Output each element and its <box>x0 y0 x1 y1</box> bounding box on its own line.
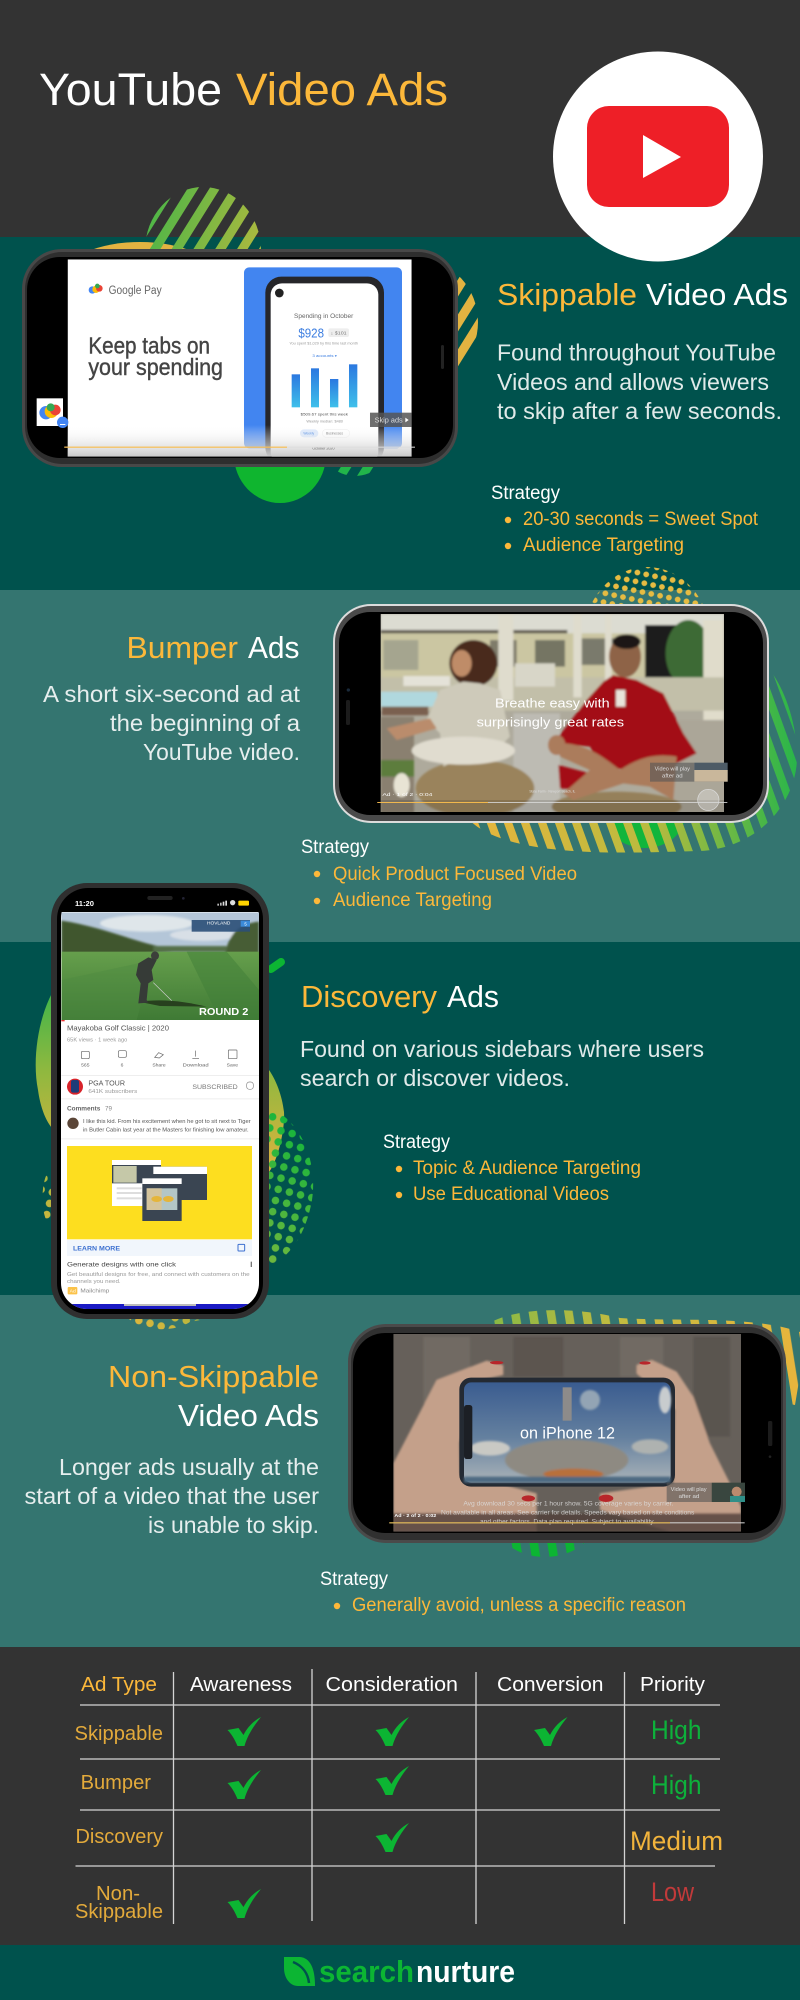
description: Found on various sidebars where users <box>300 1036 704 1062</box>
title <box>39 64 448 115</box>
description: Longer ads usually at the <box>59 1454 319 1480</box>
phone mockup: golf video with discovery ad: Get beautiful designs for free, and connect with customers on the <box>67 1272 250 1278</box>
heading: Skippable <box>497 277 637 312</box>
panel background: header <box>0 0 800 237</box>
strategy list <box>491 483 759 556</box>
table header row: Awareness <box>190 1673 292 1696</box>
phone mockup: google pay ad: ↓ $101 <box>331 330 347 335</box>
description: search or discover videos. <box>300 1065 570 1091</box>
phone mockup: golf video with discovery ad: 565 <box>81 1063 90 1069</box>
strategy list <box>383 1132 641 1205</box>
description: the beginning of a <box>110 710 301 736</box>
table row labels <box>74 1723 163 1923</box>
title: YouTube <box>39 64 222 115</box>
phone mockup: google pay ad: $509.67 spent this week <box>301 412 348 417</box>
phone mockup: iphone 12 ad: and other factors. Data plan required. Subject to availability. <box>480 1518 655 1525</box>
table header row: Ad Type <box>81 1673 157 1696</box>
heading: Video Ads <box>646 277 788 312</box>
phone mockup: meditation ad: after ad <box>662 773 683 779</box>
phone mockup: golf video with discovery ad: Comments <box>67 1106 101 1112</box>
phone mockup: google pay ad: October 2020 <box>312 446 334 450</box>
table header row: Consideration <box>326 1673 458 1696</box>
strategy list: 20-30 seconds = Sweet Spot <box>523 509 759 530</box>
phone mockup: golf video with discovery ad: Save <box>227 1063 238 1069</box>
phone mockup: golf video with discovery ad: 641K subscribers <box>88 1089 138 1095</box>
description: Videos and allows viewers <box>497 369 769 395</box>
phone mockup: google pay ad: $928 <box>298 326 324 340</box>
phone mockup: meditation ad: Video will play <box>655 767 690 773</box>
phone mockup: golf video with discovery ad: Mailchimp <box>80 1289 109 1295</box>
panel background: footer <box>0 1945 800 2000</box>
phone mockup: golf video with discovery ad: Download <box>183 1063 209 1069</box>
table row labels: Skippable <box>75 1901 163 1923</box>
panel: discovery ads <box>36 883 704 1329</box>
phone mockup: google pay ad: Google Pay <box>109 283 162 297</box>
panel background: comparison table <box>0 1647 800 1945</box>
panel background: bumper <box>0 590 800 942</box>
table header row: Conversion <box>497 1673 604 1696</box>
heading <box>108 1359 319 1433</box>
phone mockup: iphone 12 ad: Not available in all areas. See carrier for details. Speeds vary based on site conditions <box>441 1510 694 1517</box>
phone mockup: iphone 12 ad: after ad <box>679 1494 699 1500</box>
phone mockup: golf video with discovery ad: 79 <box>105 1106 113 1112</box>
phone mockup: iphone 12 ad: Ad · 2 of 2 · 0:02 <box>394 1513 437 1519</box>
table header row <box>81 1673 706 1696</box>
heading: Ads <box>248 630 300 665</box>
phone mockup: golf video with discovery ad: 5 <box>244 921 247 926</box>
phone mockup: golf video with discovery ad: I like this kid. From his excitement when he got to sit next to Tiger <box>83 1119 251 1125</box>
phone mockup: iphone 12 ad <box>348 1324 786 1543</box>
decorative blobs <box>64 187 478 503</box>
phone mockup: meditation ad: State Farm · Newport Beach, IL <box>529 790 575 794</box>
phone mockup: google pay ad: Weekly <box>303 432 315 436</box>
strategy list <box>320 1569 686 1616</box>
panel background: discovery <box>0 942 800 1295</box>
phone mockup: golf video with discovery ad: 11:20 <box>75 901 94 908</box>
panel: bumper ads <box>43 567 797 911</box>
heading: Video Ads <box>178 1398 319 1433</box>
priority values: Low <box>651 1877 695 1907</box>
phone mockup: google pay ad: your spending <box>88 354 223 380</box>
panel background: skippable <box>0 237 800 590</box>
description <box>24 1454 319 1538</box>
strategy list: Use Educational Videos <box>413 1184 609 1205</box>
phone mockup: google pay ad: Weekly median: $480 <box>306 420 343 424</box>
phone mockup: golf video with discovery ad: SUBSCRIBED <box>192 1084 238 1091</box>
phone mockup: google pay ad: 3 accounts ▾ <box>312 354 337 358</box>
phone mockup: golf video with discovery ad: Ad <box>70 1289 76 1295</box>
icon: youtube logo <box>553 52 763 262</box>
priority values: High <box>651 1715 702 1745</box>
phone mockup: golf video with discovery ad: ROUND 2 <box>199 1007 249 1018</box>
table header row: Priority <box>640 1673 706 1696</box>
heading: Ads <box>447 979 499 1014</box>
phone mockup: golf video with discovery ad: Share <box>152 1063 166 1069</box>
decorative blobs <box>465 567 797 853</box>
table row labels: Discovery <box>76 1826 163 1848</box>
strategy list: Audience Targeting <box>523 535 684 556</box>
heading: Non-Skippable <box>108 1359 319 1394</box>
footer logo: searchnurture: search <box>319 1954 414 1989</box>
comparison table <box>74 1669 723 1924</box>
phone mockup: golf video with discovery ad: Generate designs with one click <box>67 1262 177 1269</box>
phone mockup: golf video with discovery ad: 65K views · 1 week ago <box>67 1038 127 1044</box>
heading <box>126 630 300 665</box>
table grid <box>76 1669 720 1924</box>
phone mockup: meditation ad <box>333 604 769 823</box>
priority values <box>630 1715 723 1907</box>
phone mockup: meditation ad: surprisingly great rates <box>477 715 624 729</box>
phone mockup: golf video with discovery ad: HOVLAND <box>207 921 230 926</box>
strategy list: Audience Targeting <box>333 890 492 911</box>
phone mockup: golf video with discovery ad: LEARN MORE <box>73 1245 121 1252</box>
strategy list: Strategy <box>301 837 369 858</box>
phone mockup: google pay ad: You spent $1,029 by this time last month <box>289 342 358 346</box>
description: start of a video that the user <box>24 1483 319 1509</box>
strategy list <box>301 837 577 911</box>
check marks <box>228 1717 568 1918</box>
phone mockup: iphone 12 ad: Avg download 30 secs per 1 hour show. 5G coverage varies by carrier. <box>463 1501 674 1508</box>
description: YouTube video. <box>143 739 300 765</box>
footer logo: searchnurture: nurture <box>416 1954 515 1989</box>
description <box>300 1036 704 1091</box>
decorative blobs <box>470 1310 800 1557</box>
strategy list: Strategy <box>383 1132 450 1153</box>
panel background: non-skippable <box>0 1295 800 1647</box>
description: Found throughout YouTube <box>497 340 776 366</box>
heading: Discovery <box>301 979 437 1014</box>
phone mockup: golf video with discovery ad: channels you need. <box>67 1279 121 1285</box>
phone mockup: iphone 12 ad: on iPhone 12 <box>520 1423 615 1442</box>
phone mockup: google pay ad: Skip ads <box>375 415 403 424</box>
strategy list: Strategy <box>320 1569 388 1590</box>
footer logo: searchnurture <box>284 1954 515 1989</box>
phone mockup: google pay ad: Businesses <box>326 432 343 436</box>
phone mockup: google pay ad <box>22 249 458 467</box>
priority values: High <box>651 1770 702 1800</box>
table row labels: Non- <box>96 1883 140 1905</box>
strategy list: Topic & Audience Targeting <box>413 1158 641 1179</box>
panel: skippable video ads <box>22 187 788 556</box>
phone mockup: iphone 12 ad: Video will play <box>671 1487 707 1493</box>
description: to skip after a few seconds. <box>497 398 782 424</box>
panel: non-skippable video ads <box>24 1310 800 1616</box>
priority values: Medium <box>630 1826 723 1856</box>
strategy list: Generally avoid, unless a specific reason <box>352 1595 686 1616</box>
decorative blobs <box>36 962 313 1329</box>
strategy list: Quick Product Focused Video <box>333 864 577 885</box>
phone mockup: golf video with discovery ad: 6 <box>121 1063 124 1069</box>
title: Video Ads <box>236 64 448 115</box>
description: is unable to skip. <box>148 1512 319 1538</box>
phone mockup: meditation ad: Ad · 1 of 2 · 0:04 <box>382 792 433 798</box>
phone mockup: golf video with discovery ad: Mayakoba Golf Classic | 2020 <box>67 1026 169 1033</box>
phone mockup: google pay ad: Ad · 1 of 2 · 0:04 <box>70 437 111 443</box>
description <box>497 340 782 424</box>
phone mockup: golf video with discovery ad: PGA TOUR <box>88 1080 125 1087</box>
phone mockup: google pay ad: Keep tabs on <box>88 332 210 358</box>
phone mockup: google pay ad: Spending in October <box>294 313 354 320</box>
phone mockup: golf video with discovery ad: in Butler Cabin last year at the Masters for finishing low amateur. <box>83 1128 249 1134</box>
description: A short six-second ad at <box>43 681 300 707</box>
table row labels: Skippable <box>74 1723 163 1745</box>
heading <box>497 277 788 312</box>
table row labels: Bumper <box>81 1772 151 1794</box>
phone mockup: meditation ad: Breathe easy with <box>495 696 610 710</box>
phone mockup: golf video with discovery ad <box>51 883 269 1319</box>
heading <box>301 979 499 1014</box>
heading: Bumper <box>126 630 238 665</box>
strategy list: Strategy <box>491 483 560 504</box>
description <box>43 681 301 765</box>
